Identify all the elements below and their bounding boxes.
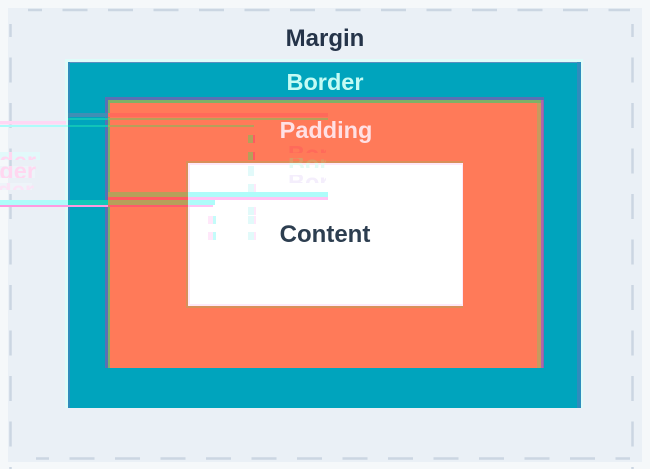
heading: padding: Padding: [280, 117, 372, 143]
glitch dashes: vertical offset artifacts: [208, 135, 256, 240]
panel: padding box: [105, 97, 544, 368]
ghost label: offset border text: [0, 146, 326, 190]
heading: border: Border: [286, 69, 364, 95]
heading: content: Content: [280, 221, 370, 248]
glitch lines: horizontal offset artifacts: [0, 113, 328, 207]
panel: border box: [65, 59, 583, 408]
ghost label: offset border text: Border: [288, 151, 365, 177]
ghost label: offset border text: Border: [288, 169, 365, 195]
panel: content box: [186, 161, 463, 308]
ghost label: offset border text: Border: [288, 141, 365, 167]
heading: margin: Margin: [286, 25, 364, 52]
ghost label: offset border text: Border: [288, 151, 365, 177]
